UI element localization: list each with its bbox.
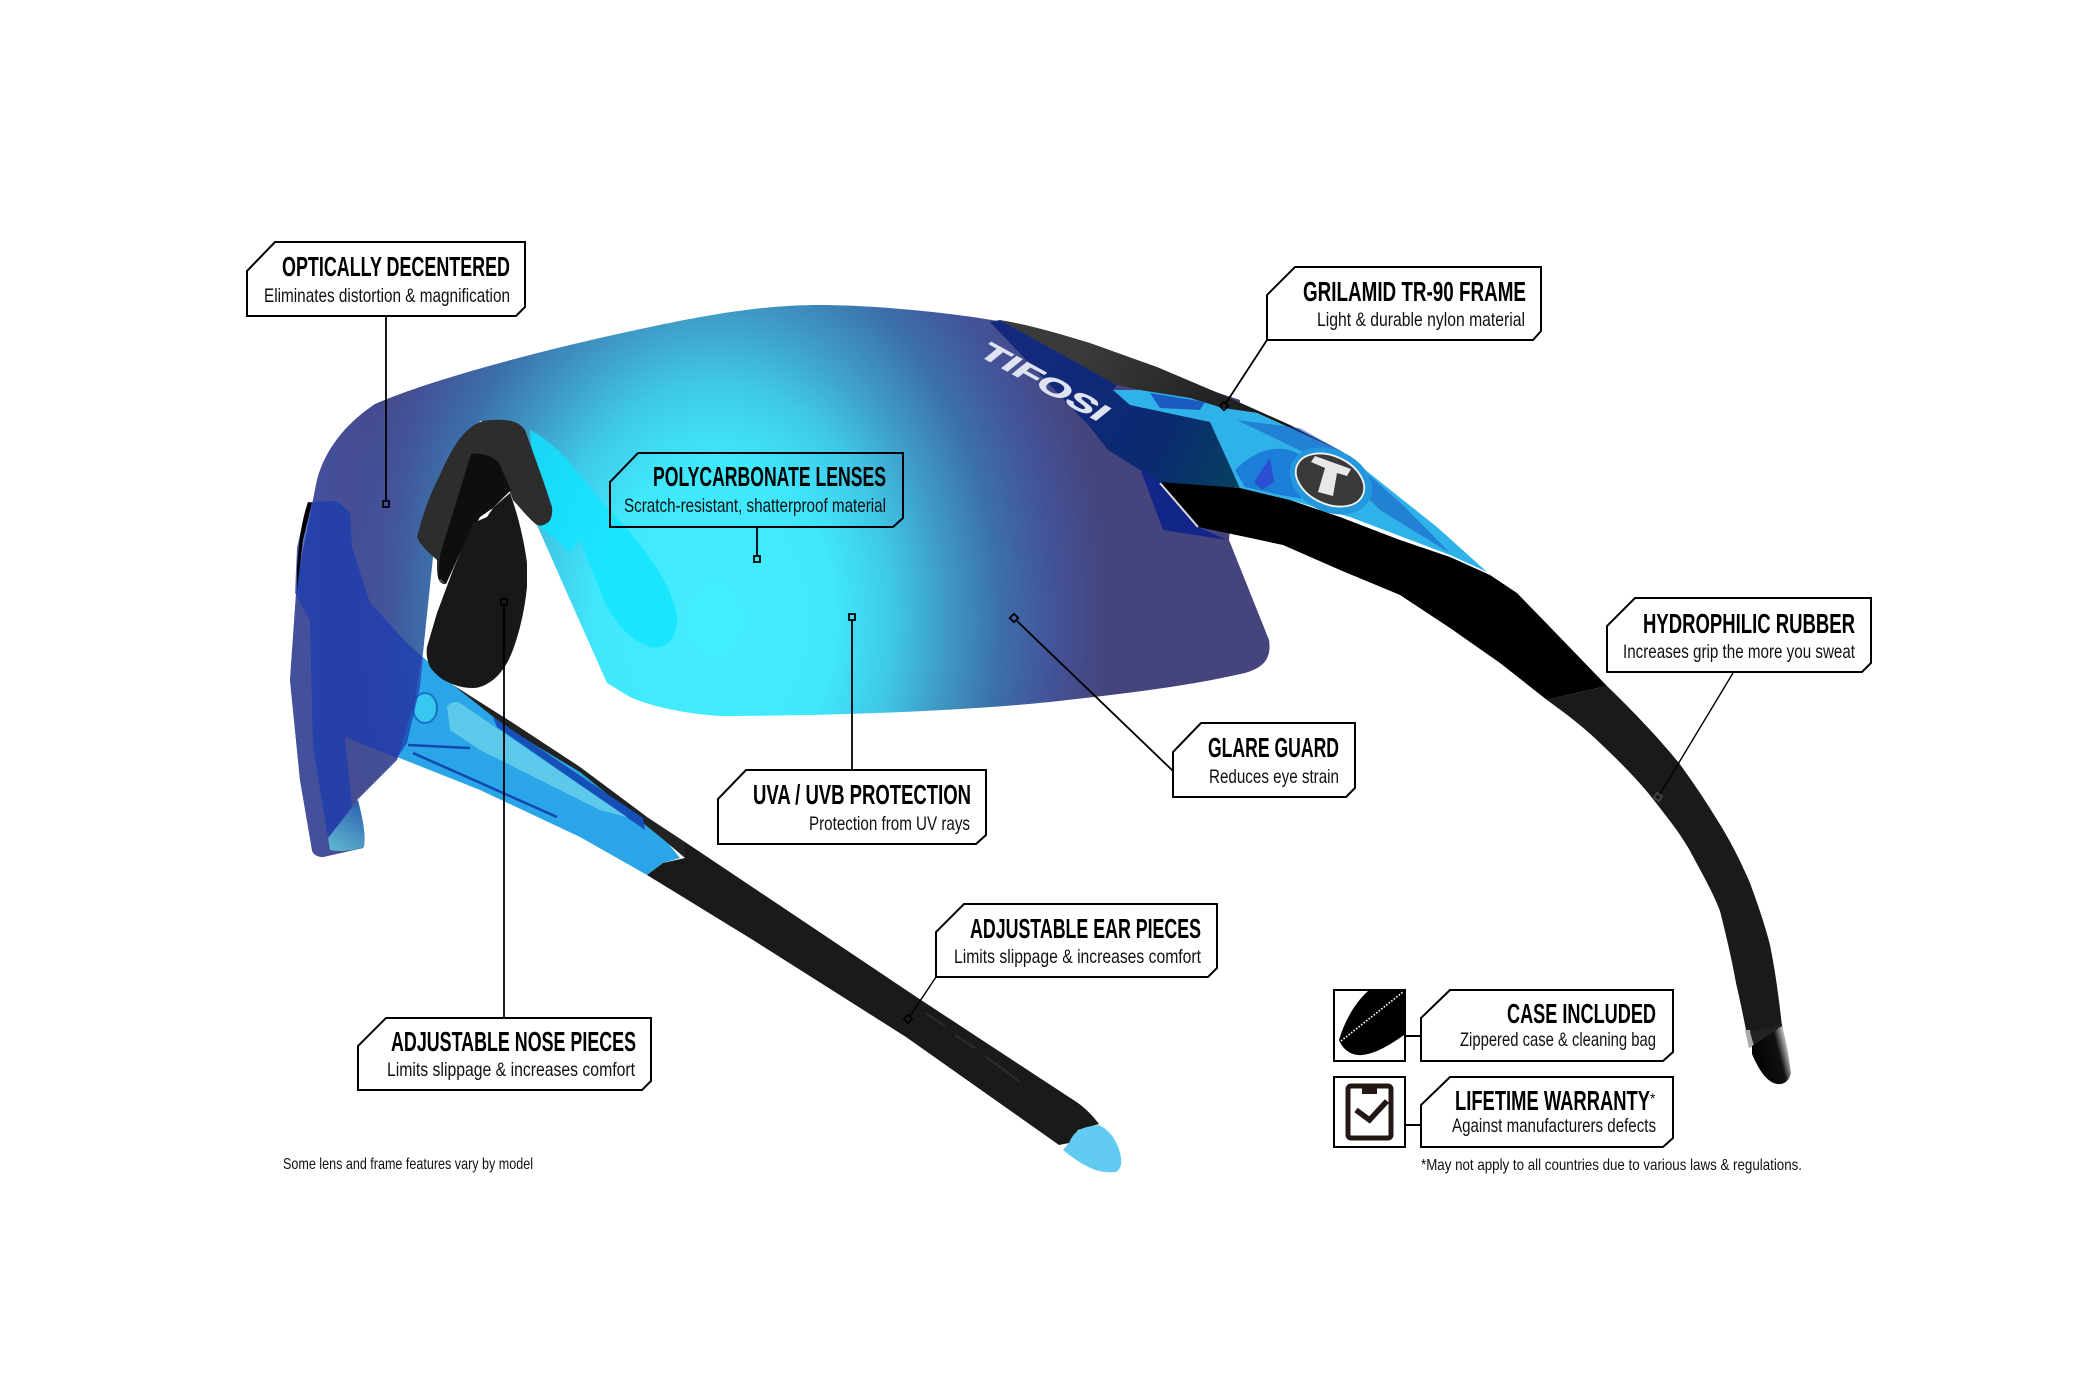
near temple dark stripe xyxy=(493,717,645,830)
lens edge dark sliver xyxy=(297,502,312,590)
callout: hydrophilic rubber xyxy=(1607,598,1871,801)
far temple cuff xyxy=(1745,1030,1754,1048)
nose pad lower xyxy=(427,493,527,688)
callout: polycarbonate lenses: Scratch-resistant, shatterproof material xyxy=(624,495,886,517)
ear piece grooves xyxy=(925,1013,1020,1082)
callout: grilamid frame: GRILAMID TR-90 FRAME xyxy=(1303,276,1526,307)
frame lower decoration xyxy=(1235,449,1310,500)
near temple lower lines xyxy=(408,745,557,817)
brand name on lens: TIFOSI xyxy=(971,338,1118,426)
model footnote: Some lens and frame features vary by model xyxy=(283,1156,533,1173)
left lens tint xyxy=(290,404,480,857)
callout: lifetime warranty: LIFETIME WARRANTY xyxy=(1455,1085,1650,1116)
callout: hydrophilic rubber: HYDROPHILIC RUBBER xyxy=(1643,608,1855,639)
callout: optically decentered xyxy=(247,242,525,507)
callout: optically decentered: OPTICALLY DECENTERED xyxy=(282,251,510,282)
near hinge xyxy=(413,693,437,723)
callout: case included: Zippered case & cleaning bag xyxy=(1460,1029,1656,1051)
callout: hydrophilic rubber: Increases grip the more you sweat xyxy=(1623,641,1855,663)
far temple matte xyxy=(1547,686,1782,1035)
callout: UVA / UVB protection xyxy=(718,614,986,844)
far temple end highlight xyxy=(1160,483,1198,527)
callout: UVA / UVB protection: Protection from UV rays xyxy=(809,813,970,835)
near temple tip xyxy=(1063,1125,1121,1172)
near temple blue xyxy=(397,657,680,875)
frame top stripe xyxy=(1237,420,1450,553)
callout: lifetime warranty xyxy=(1421,1077,1673,1147)
left lens tip highlight xyxy=(328,800,365,851)
near temple dark edge xyxy=(453,685,685,858)
warranty footnote: *May not apply to all countries due to various laws & regulations. xyxy=(1421,1157,1802,1174)
sunglasses illustration xyxy=(290,305,1791,1172)
callout: glare guard: GLARE GUARD xyxy=(1208,732,1339,763)
lens nose shadow xyxy=(530,430,677,648)
callout: case included: CASE INCLUDED xyxy=(1507,998,1656,1029)
far temple tip xyxy=(1752,1026,1791,1084)
near temple rubber xyxy=(647,842,1099,1145)
callout: lifetime warranty: * xyxy=(1650,1090,1656,1106)
nose bridge dark xyxy=(438,453,511,584)
far temple gloss xyxy=(1160,482,1607,700)
far frame brow xyxy=(1000,320,1343,452)
temple logo xyxy=(1279,435,1383,527)
callout: optically decentered: Eliminates distortion & magnification xyxy=(264,285,510,307)
crystal blue frame xyxy=(1113,390,1487,572)
near temple highlight xyxy=(447,702,627,817)
callout: adjustable nose pieces: Limits slippage & increases comfort xyxy=(387,1059,635,1081)
icon: case xyxy=(1334,990,1421,1061)
callout: polycarbonate lenses xyxy=(610,453,903,562)
callout: glare guard: Reduces eye strain xyxy=(1209,766,1339,788)
navy lens mount xyxy=(990,320,1240,488)
callout: grilamid frame: Light & durable nylon material xyxy=(1317,309,1525,331)
icon: warranty clipboard xyxy=(1334,1077,1421,1147)
frame dark inlay xyxy=(1150,393,1205,410)
callout: adjustable ear pieces xyxy=(904,904,1217,1023)
callout: lifetime warranty: Against manufacturers defects xyxy=(1452,1115,1656,1137)
callout: adjustable nose pieces: ADJUSTABLE NOSE PIECES xyxy=(391,1026,636,1057)
nose bridge grey xyxy=(417,420,552,584)
callout: glare guard xyxy=(1010,614,1355,797)
dark arm seen through left lens xyxy=(295,501,423,838)
callout: grilamid frame xyxy=(1220,267,1541,410)
callout: polycarbonate lenses: POLYCARBONATE LENSES xyxy=(653,461,886,492)
callout: adjustable nose pieces xyxy=(358,599,651,1090)
navy mount lower wedge xyxy=(1140,468,1227,540)
callout: case included xyxy=(1421,990,1673,1061)
callout: UVA / UVB protection: UVA / UVB PROTECTION xyxy=(753,779,971,810)
lens xyxy=(290,305,1270,857)
callout: adjustable ear pieces: ADJUSTABLE EAR PIECES xyxy=(970,913,1201,944)
callout: adjustable ear pieces: Limits slippage & increases comfort xyxy=(954,946,1201,968)
